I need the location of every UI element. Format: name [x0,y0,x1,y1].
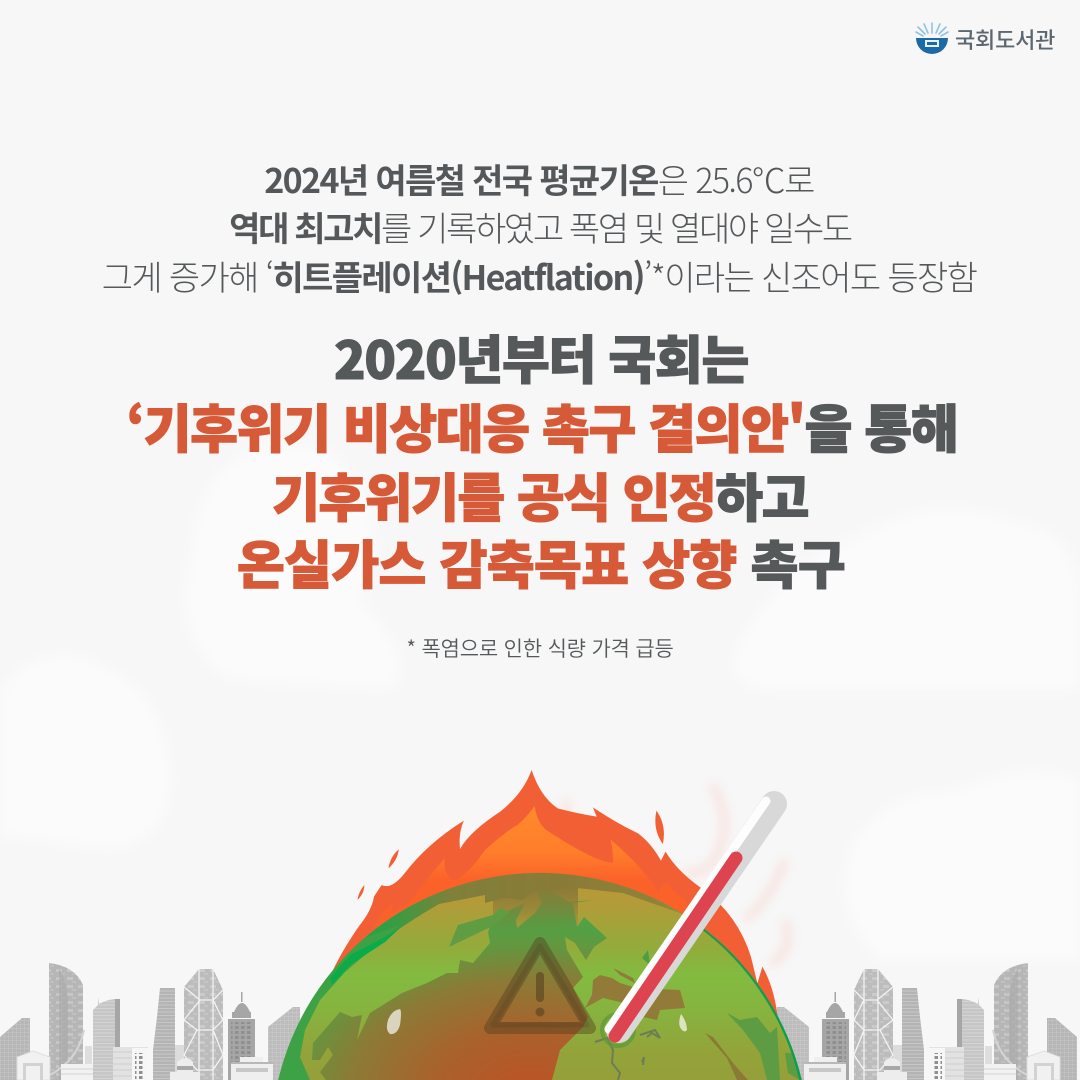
central ocean [312,888,607,1080]
logo: National Assembly Library [915,22,1055,55]
heat waves [560,785,788,965]
warning triangle [490,943,590,1028]
logo wordmark: 국회도서관 [955,23,1055,55]
left rim band [278,929,390,1080]
thermometer tube [619,804,774,1030]
illustration: skyline, burning globe and thermometer [0,770,1077,1080]
globe [278,870,802,1080]
thermometer mercury [615,858,736,1036]
top ocean fade [493,888,578,926]
brown streak [705,1033,748,1080]
intro text block [102,154,977,300]
outer flame [330,770,778,1050]
dark inlet [449,908,510,947]
intro line 3: 그게 증가해 ‘히트플레이션(Heatflation)’*이라는 신조어도 등장함 [102,251,976,300]
sweat drops [387,1009,687,1034]
small green island [642,950,650,964]
bright rim crescent [330,928,400,985]
thermometer base ring [602,1014,634,1046]
far right coast [785,1053,800,1080]
inner flame [374,806,692,928]
flames [330,770,778,1050]
footnote: * 폭염으로 인한 식량 가격 급등 [406,633,674,663]
intro line 2: 역대 최고치를 기록하였고 폭염 및 열대야 일수도 [229,202,851,251]
skyline left [0,963,300,1080]
flame sparks [357,811,664,900]
logo emblem [915,22,949,54]
skyline right [777,963,1077,1080]
thermometer [602,801,774,1046]
top ocean band [343,872,683,958]
intro line 1: 2024년 여름철 전국 평균기온은 25.6℃로 [264,154,814,203]
right green coast [727,1013,780,1080]
right rim [700,925,802,1080]
heading line 4: 온실가스 감축목표 상향 촉구 [237,524,845,599]
thermometer highlight [609,801,766,1029]
globe land base [278,873,802,1080]
heading line 1: 2020년부터 국회는 [334,319,748,394]
small land streak [613,968,635,983]
main heading [127,319,957,599]
heading line 2: ‘기후위기 비상대응 촉구 결의안'을 통해 [127,388,957,463]
asia landmass [585,975,685,1020]
cracks [595,1030,660,1080]
heading line 3: 기후위기를 공식 인정하고 [272,457,808,532]
